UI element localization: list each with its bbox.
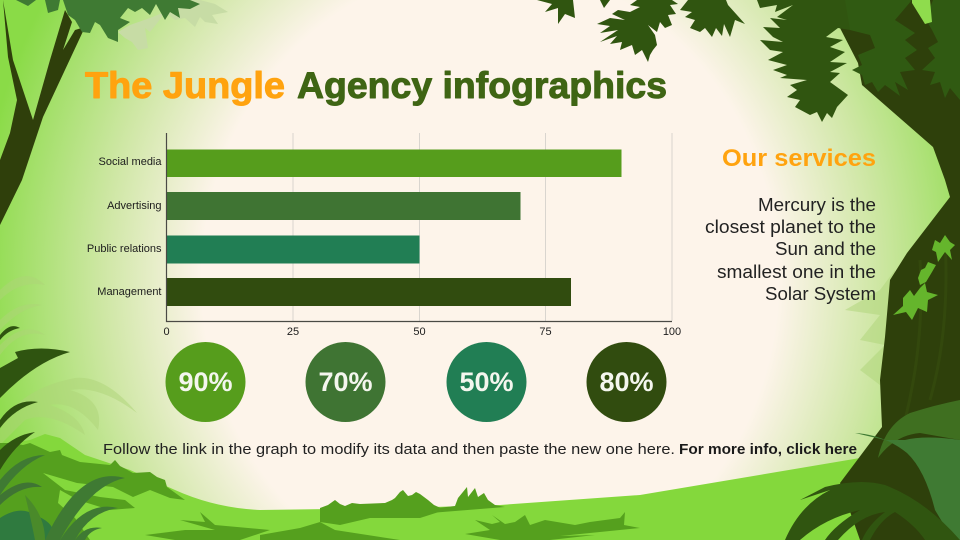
faded ferns: [0, 270, 895, 445]
services description: Mercury is the: [758, 195, 876, 215]
top leaves: [537, 0, 745, 62]
category labels: Advertising: [107, 200, 162, 212]
ground: [0, 434, 960, 540]
footer note: For more info, click here: [679, 442, 857, 458]
third foliage: [922, 0, 960, 100]
light leaf: [855, 433, 960, 540]
value labels: [163, 326, 681, 338]
services description: smallest one in the: [717, 262, 876, 282]
second foliage: [845, 0, 917, 96]
percentage circles: [166, 342, 666, 422]
title: Agency infographics: [297, 65, 667, 106]
circle: 80%: 80%: [599, 367, 654, 397]
category labels: Social media: [99, 156, 162, 168]
title: The Jungle: [85, 65, 285, 106]
circle: 80%: [586, 342, 666, 422]
category labels: Public relations: [87, 243, 162, 255]
upper leaf: [878, 400, 960, 458]
circle: 90%: [166, 342, 246, 422]
circle: 70%: [306, 342, 386, 422]
value labels: 50: [413, 326, 426, 338]
value labels: 100: [663, 326, 681, 338]
circle: 50%: [446, 342, 526, 422]
right ferns: [785, 400, 960, 540]
circle: 50%: 50%: [459, 367, 514, 397]
services description: closest planet to the: [705, 217, 876, 237]
bright leaves on trunk: [893, 235, 955, 320]
tree trunk: [0, 0, 85, 225]
axes: [166, 133, 672, 322]
services description: Solar System: [765, 284, 876, 304]
value labels: 25: [287, 326, 299, 338]
left tree: [0, 0, 228, 225]
lower dark fern: [785, 482, 960, 540]
value labels: 75: [539, 326, 552, 338]
title: [85, 65, 667, 106]
bar: advertising: [167, 192, 520, 220]
right tree: [757, 0, 960, 540]
services description: [705, 195, 876, 304]
services description: Sun and the: [775, 239, 876, 259]
bar: social media: [167, 150, 622, 177]
faded foliage: [118, 0, 228, 50]
circle: 90%: 90%: [178, 367, 233, 397]
left ferns: [0, 326, 125, 540]
services heading: Our services: [722, 145, 876, 172]
foliage: [63, 0, 200, 42]
small foliage: [16, 0, 60, 13]
main foliage: [757, 0, 860, 122]
sky gap: [912, 0, 932, 24]
trunk streaks: [905, 240, 946, 420]
bar: management: [167, 278, 571, 306]
category labels: Management: [97, 286, 162, 298]
tree trunk: [840, 0, 960, 540]
footer note: [103, 442, 857, 458]
bar chart: [87, 133, 681, 338]
category labels: [87, 156, 162, 298]
footer note: Follow the link in the graph to modify its data and then paste the new one here.: [103, 442, 675, 458]
bar: public relations: [167, 236, 420, 264]
circle: 70%: 70%: [318, 367, 373, 397]
value labels: 0: [163, 326, 170, 338]
grid lines: [293, 133, 672, 321]
